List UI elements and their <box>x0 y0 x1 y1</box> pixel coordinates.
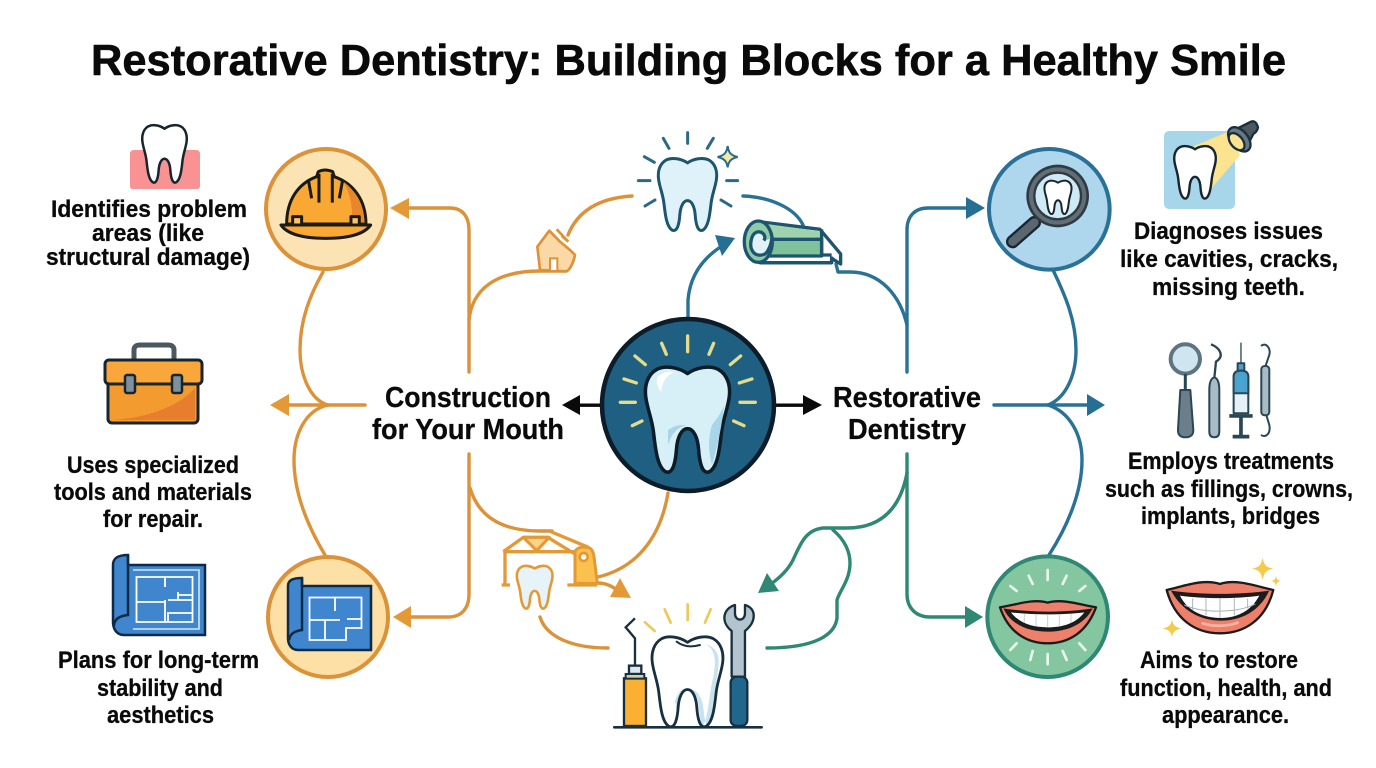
central tooth <box>645 367 730 472</box>
connectors: construction (orange) <box>285 196 668 648</box>
icon: crane with tooth <box>502 531 597 609</box>
text: diagnoses issues: missing teeth. <box>1152 274 1305 301</box>
label: restorative dentistry <box>833 382 981 446</box>
central tooth badge <box>602 319 774 491</box>
text: long-term plans: Plans for long-term <box>58 647 259 674</box>
spark rays <box>645 604 711 631</box>
icon: damaged house <box>537 229 575 271</box>
text: long-term plans: stability and <box>97 675 223 702</box>
icon: blueprint <box>113 555 205 635</box>
text: diagnoses issues <box>1120 218 1338 301</box>
text: specialized tools <box>54 452 252 533</box>
icon: toolbox <box>105 345 202 423</box>
arrowheads: outcomes <box>758 573 983 628</box>
text: employs treatments <box>1105 448 1353 530</box>
badge rays <box>620 336 755 426</box>
icon: shining tooth <box>638 133 738 231</box>
text: long-term plans: aesthetics <box>107 702 214 729</box>
text: specialized tools: Uses specialized <box>67 452 239 479</box>
icon: blueprint circle <box>268 557 388 677</box>
text: employs treatments: such as fillings, crowns, <box>1105 476 1353 503</box>
arrowheads: construction <box>270 198 631 628</box>
text: specialized tools: for repair. <box>103 506 203 533</box>
probe <box>1209 344 1221 437</box>
arrowheads: restorative <box>715 197 1105 416</box>
label: construction for your mouth: for Your Mouth <box>372 414 564 446</box>
label: construction for your mouth: Construction <box>385 382 551 414</box>
label: restorative dentistry: Restorative <box>833 382 981 414</box>
icon: magnifier circle <box>989 149 1110 270</box>
text: employs treatments: Employs treatments <box>1128 448 1334 475</box>
text: aims to restore: Aims to restore <box>1140 647 1298 674</box>
icon: dental instruments <box>1171 343 1270 437</box>
text: aims to restore: function, health, and <box>1120 675 1332 702</box>
text: identifies problem areas: structural damage) <box>46 244 250 271</box>
large tooth <box>652 637 723 727</box>
icon: hard hat circle <box>266 149 386 269</box>
text: long-term plans <box>58 647 259 729</box>
syringe <box>1229 343 1253 437</box>
panel: centre icons <box>502 133 841 727</box>
scaler <box>1261 345 1270 436</box>
text: diagnoses issues: Diagnoses issues <box>1134 218 1323 245</box>
text: identifies problem areas: areas (like <box>92 220 204 247</box>
explorer tool <box>624 618 646 726</box>
text: identifies problem areas <box>46 196 250 271</box>
panel: right column <box>987 121 1353 729</box>
panel: left column <box>46 125 388 729</box>
text: aims to restore: appearance. <box>1162 702 1289 729</box>
text: aims to restore <box>1120 647 1332 729</box>
icon: tooth in gum <box>130 125 200 189</box>
connectors: restorative (blue) <box>688 196 1090 555</box>
connector: centre arrows <box>562 395 822 415</box>
mirror <box>1171 344 1200 437</box>
icon: tooth with tools <box>614 604 762 727</box>
icon: tooth under spotlight <box>1164 121 1258 209</box>
text: specialized tools: tools and materials <box>54 479 252 506</box>
title: Restorative Dentistry: Building Blocks for a Healthy Smile <box>91 36 1286 85</box>
label: restorative dentistry: Dentistry <box>848 414 966 446</box>
icon: smile with sparkles <box>1163 558 1281 637</box>
wrench <box>724 605 754 726</box>
icon: rolled plan scroll <box>744 221 841 264</box>
icon: smile circle <box>987 556 1108 677</box>
text: employs treatments: implants, bridges <box>1141 503 1320 530</box>
label: construction for your mouth <box>372 382 564 446</box>
text: diagnoses issues: like cavities, cracks, <box>1120 246 1338 273</box>
connectors: outcomes (green) <box>767 454 968 648</box>
ground line <box>614 723 762 731</box>
text: identifies problem areas: Identifies problem <box>51 196 247 223</box>
